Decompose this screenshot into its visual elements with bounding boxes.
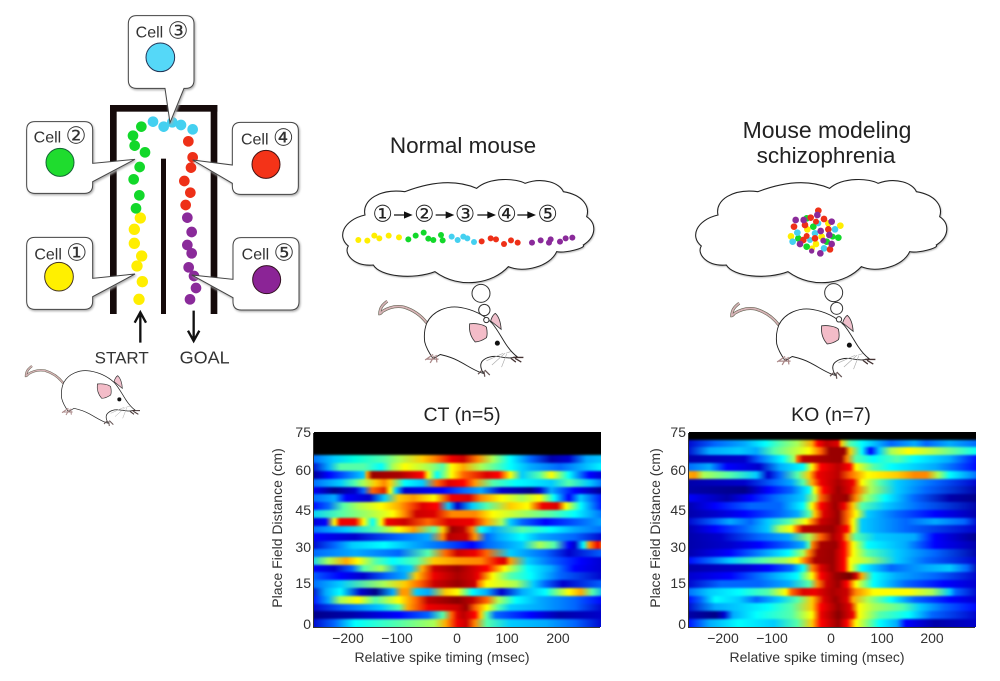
place cell firing dots along maze	[128, 116, 201, 305]
CT y axis labels	[295, 424, 311, 632]
callout: cell 2	[27, 122, 135, 193]
callout: cell 3: Cell	[136, 24, 163, 41]
label: goal: GOAL	[180, 347, 230, 367]
icon: normal mouse	[380, 301, 523, 377]
CT y axis title: Place Field Distance (cm)	[269, 448, 285, 608]
CT x axis title: Relative spike timing (msec)	[354, 649, 530, 665]
left panel: maze diagram	[26, 16, 299, 426]
callout: cell 4: Cell	[241, 131, 269, 148]
KO x axis labels: 200	[920, 630, 944, 646]
arrow: goal	[188, 311, 199, 341]
KO x axis title: Relative spike timing (msec)	[729, 649, 905, 665]
KO y axis labels: 30	[670, 539, 686, 555]
callout: cell 5: Cell	[242, 246, 269, 263]
CT y axis labels: 45	[295, 502, 311, 518]
KO x axis labels: 100	[870, 630, 894, 646]
KO y axis title: Place Field Distance (cm)	[647, 448, 663, 608]
heatmap: KO	[689, 432, 976, 627]
icon: mouse at start	[26, 366, 140, 426]
KO y axis labels: 0	[678, 616, 686, 632]
CT y axis labels: 30	[295, 539, 311, 555]
sequence numbers with arrows: ④	[497, 200, 517, 226]
CT y axis labels: 75	[295, 424, 311, 440]
CT x axis labels: −200	[332, 630, 364, 646]
KO x axis labels: −100	[756, 630, 788, 646]
callout: cell 4: ④	[273, 125, 294, 151]
sequence numbers with arrows: ①	[373, 200, 393, 226]
callout: cell 1	[27, 237, 135, 309]
icon: schizophrenia model mouse	[732, 303, 875, 379]
callout: cell 4	[193, 122, 298, 194]
sequence numbers with arrows: ⑤	[538, 200, 558, 226]
callout: cell 5	[192, 238, 299, 310]
heatmap: CT	[314, 432, 601, 627]
arrow: start	[135, 312, 146, 343]
sequence numbers with arrows: ②	[414, 200, 434, 226]
CT y axis labels: 60	[295, 462, 311, 478]
CT y axis labels: 0	[303, 616, 311, 632]
KO x axis labels	[707, 630, 944, 646]
KO y axis labels: 15	[670, 575, 686, 591]
heading: mouse modeling schizophrenia: schizophrenia	[757, 143, 896, 168]
callout: cell 1: ①	[66, 240, 87, 266]
callout: cell 1: Cell	[34, 246, 62, 263]
callout: cell 3	[128, 16, 194, 123]
callout: cell 3: ③	[168, 18, 189, 44]
callout: cell 2: Cell	[34, 129, 61, 146]
disordered firing dots cluster	[788, 207, 844, 257]
ordered firing dots	[355, 230, 575, 247]
normal mouse thought cloud	[343, 180, 594, 283]
label: start: START	[95, 348, 149, 367]
KO y axis labels: 45	[670, 502, 686, 518]
KO y axis labels	[670, 424, 686, 632]
thought bubbles: normal mouse	[472, 284, 490, 323]
KO y axis labels: 60	[670, 462, 686, 478]
CT x axis labels: −100	[381, 630, 413, 646]
CT y axis labels: 15	[295, 575, 311, 591]
thought bubbles: schizophrenia mouse	[825, 284, 843, 322]
maze walls	[110, 105, 217, 314]
heading: mouse modeling schizophrenia: Mouse modeling	[743, 117, 911, 143]
KO x axis labels: −200	[707, 630, 739, 646]
schizophrenia mouse thought cloud	[696, 180, 947, 283]
callout: cell 5: ⑤	[274, 240, 295, 266]
CT x axis labels: 200	[546, 630, 570, 646]
heading: normal mouse: Normal mouse	[390, 133, 536, 158]
sequence numbers with arrows: ③	[455, 200, 475, 226]
title: CT: CT (n=5)	[423, 404, 501, 426]
sequence numbers with arrows	[373, 200, 558, 226]
CT x axis labels	[332, 630, 570, 646]
KO x axis labels: 0	[827, 630, 835, 646]
KO y axis labels: 75	[670, 424, 686, 440]
callout: cell 2: ②	[66, 123, 87, 149]
title: KO: KO (n=7)	[791, 404, 871, 426]
CT x axis labels: 100	[495, 630, 519, 646]
CT x axis labels: 0	[453, 630, 461, 646]
